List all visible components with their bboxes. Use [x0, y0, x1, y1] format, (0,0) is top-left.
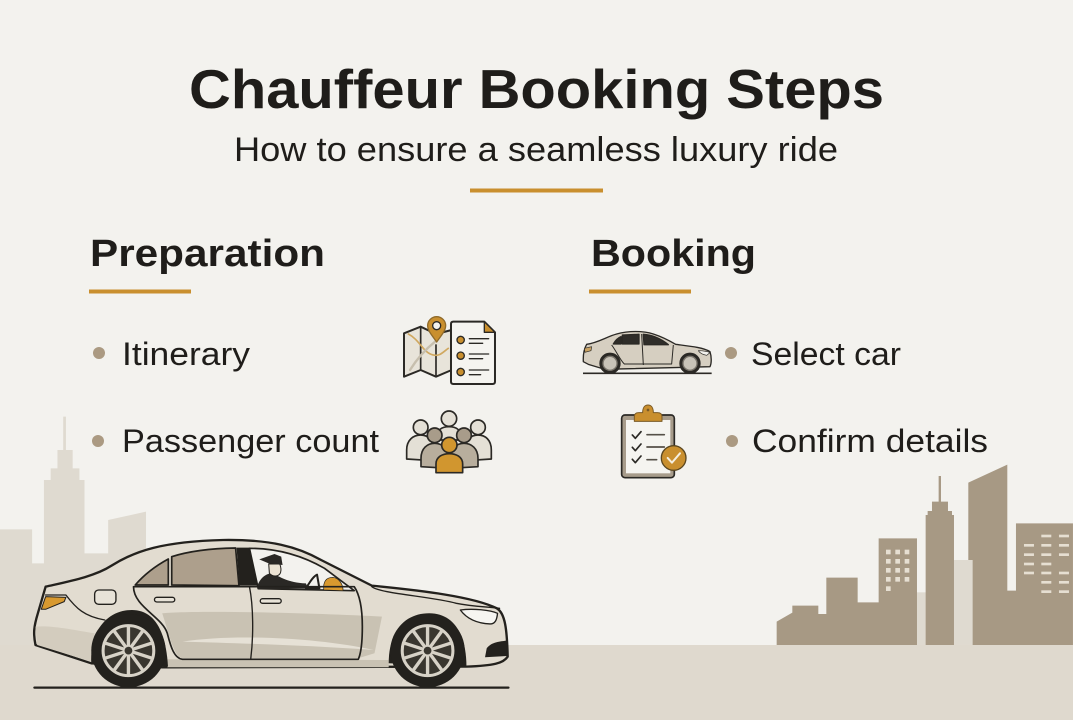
ground band [0, 645, 1073, 720]
list item: confirm details: Confirm details [752, 423, 988, 459]
front window [249, 548, 354, 591]
icon: small car [583, 331, 712, 373]
car body [34, 540, 508, 667]
door handles [154, 597, 175, 602]
door pillar [237, 548, 258, 586]
subtitle: How to ensure a seamless luxury ride [234, 131, 838, 169]
icon: clipboard checklist [622, 405, 686, 478]
tail light [41, 597, 66, 609]
icon: group of passengers [407, 411, 491, 473]
hood line and headlight [372, 587, 500, 608]
title: Chauffeur Booking Steps [189, 58, 884, 120]
illustration: sedan with chauffeur [34, 540, 508, 688]
list item: select car: Select car [751, 336, 901, 372]
heading: preparation [89, 233, 325, 294]
fuel cap [95, 590, 116, 604]
door lines [134, 587, 362, 659]
chauffeur [258, 554, 319, 589]
rear wheel [91, 610, 168, 687]
right background skyline [777, 465, 1073, 645]
list item: passenger count: Passenger count [122, 423, 379, 459]
heading: booking: Booking [591, 233, 756, 275]
left background skyline [0, 417, 237, 647]
list item: itinerary: Itinerary [122, 336, 250, 372]
body shading [162, 612, 382, 658]
building windows [886, 535, 1069, 593]
heading: preparation: Preparation [90, 233, 325, 275]
side mirror [324, 577, 343, 591]
pale background buildings [915, 560, 975, 645]
rear windows [135, 559, 168, 585]
dark buildings [777, 465, 1073, 645]
road line [34, 684, 508, 691]
title divider [470, 188, 603, 192]
heading: booking [589, 233, 756, 294]
front wheel [389, 613, 466, 687]
icon: map and itinerary document [404, 317, 495, 384]
